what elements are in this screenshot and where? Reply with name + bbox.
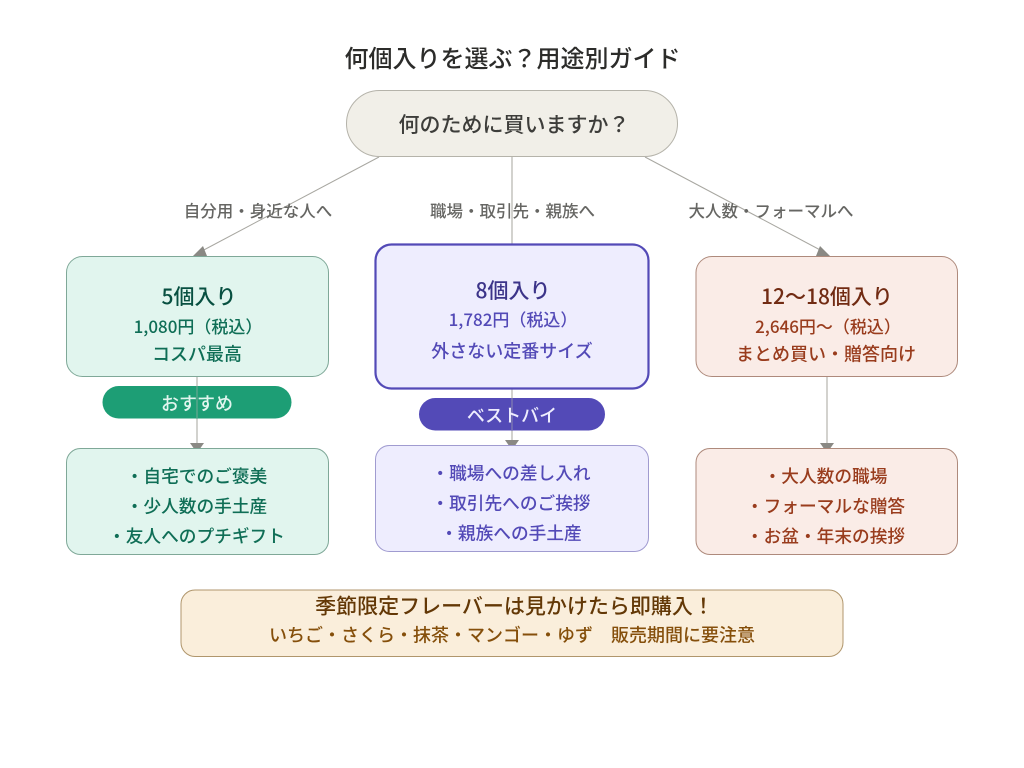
panel: 8-pack uses <box>376 446 648 552</box>
badge: recommended: おすすめ <box>161 390 233 416</box>
panel: 12-18-pack uses <box>696 448 958 554</box>
root question box: 何のために買いますか？ <box>398 109 630 139</box>
use list: 8-pack <box>431 460 591 546</box>
arrow: root to 8-pack <box>511 157 513 244</box>
price: 5-pack: 1,080円（税込） <box>134 313 262 338</box>
callout heading: 季節限定フレーバーは見かけたら即購入！ <box>315 590 714 620</box>
branch label: formal: 大人数・フォーマルへ <box>688 198 854 222</box>
branch label: personal: 自分用・身近な人へ <box>184 198 332 222</box>
badge: recommended <box>102 386 292 418</box>
use list: 5-pack <box>108 462 285 548</box>
panel: 5-pack <box>66 256 328 376</box>
use list: 12-18-pack <box>746 462 905 548</box>
callout detail: いちご・さくら・抹茶・マンゴー・ゆず 販売期間に要注意 <box>269 622 755 648</box>
use list: 12-18-pack: ・大人数の職場 <box>764 462 888 488</box>
note: 12-18-pack: まとめ買い・贈答向け <box>736 340 916 366</box>
arrow: 8-pack to uses <box>505 389 519 450</box>
heading: 12-18-pack: 12〜18個入り <box>761 281 893 311</box>
use list: 5-pack: ・友人へのプチギフト <box>108 522 285 548</box>
heading: 8-pack: 8個入り <box>476 275 550 305</box>
title: 何個入りを選ぶ？用途別ガイド <box>344 39 680 74</box>
branch label: workplace: 職場・取引先・親族へ <box>430 198 595 222</box>
note: 8-pack: 外さない定番サイズ <box>431 338 593 364</box>
badge: best buy: ベストバイ <box>467 402 557 428</box>
heading: 5-pack: 5個入り <box>162 281 236 311</box>
price: 8-pack: 1,782円（税込） <box>449 306 577 331</box>
use list: 12-18-pack: ・お盆・年末の挨拶 <box>746 522 905 548</box>
use list: 12-18-pack: ・フォーマルな贈答 <box>746 492 905 518</box>
badge: best buy <box>419 398 605 430</box>
use list: 8-pack: ・職場への差し入れ <box>431 460 591 486</box>
panel: 5-pack uses <box>66 448 328 554</box>
note: 5-pack: コスパ最高 <box>152 340 242 366</box>
callout: seasonal flavours <box>181 590 843 656</box>
use list: 5-pack: ・自宅でのご褒美 <box>126 462 268 488</box>
panel: 12-18-pack <box>696 256 958 376</box>
panel: 8-pack (highlighted) <box>376 244 648 388</box>
use list: 5-pack: ・少人数の手土産 <box>126 492 267 518</box>
use list: 8-pack: ・取引先へのご挨拶 <box>431 490 591 516</box>
arrow: 5-pack to uses <box>190 377 204 453</box>
arrow: 12-18-pack to uses <box>820 377 834 453</box>
use list: 8-pack: ・親族への手土産 <box>440 520 582 546</box>
arrow: root to 5-pack <box>193 157 379 256</box>
arrow: root to 12-18-pack <box>645 157 830 256</box>
root question box <box>346 90 678 156</box>
price: 12-18-pack: 2,646円〜（税込） <box>755 313 901 338</box>
